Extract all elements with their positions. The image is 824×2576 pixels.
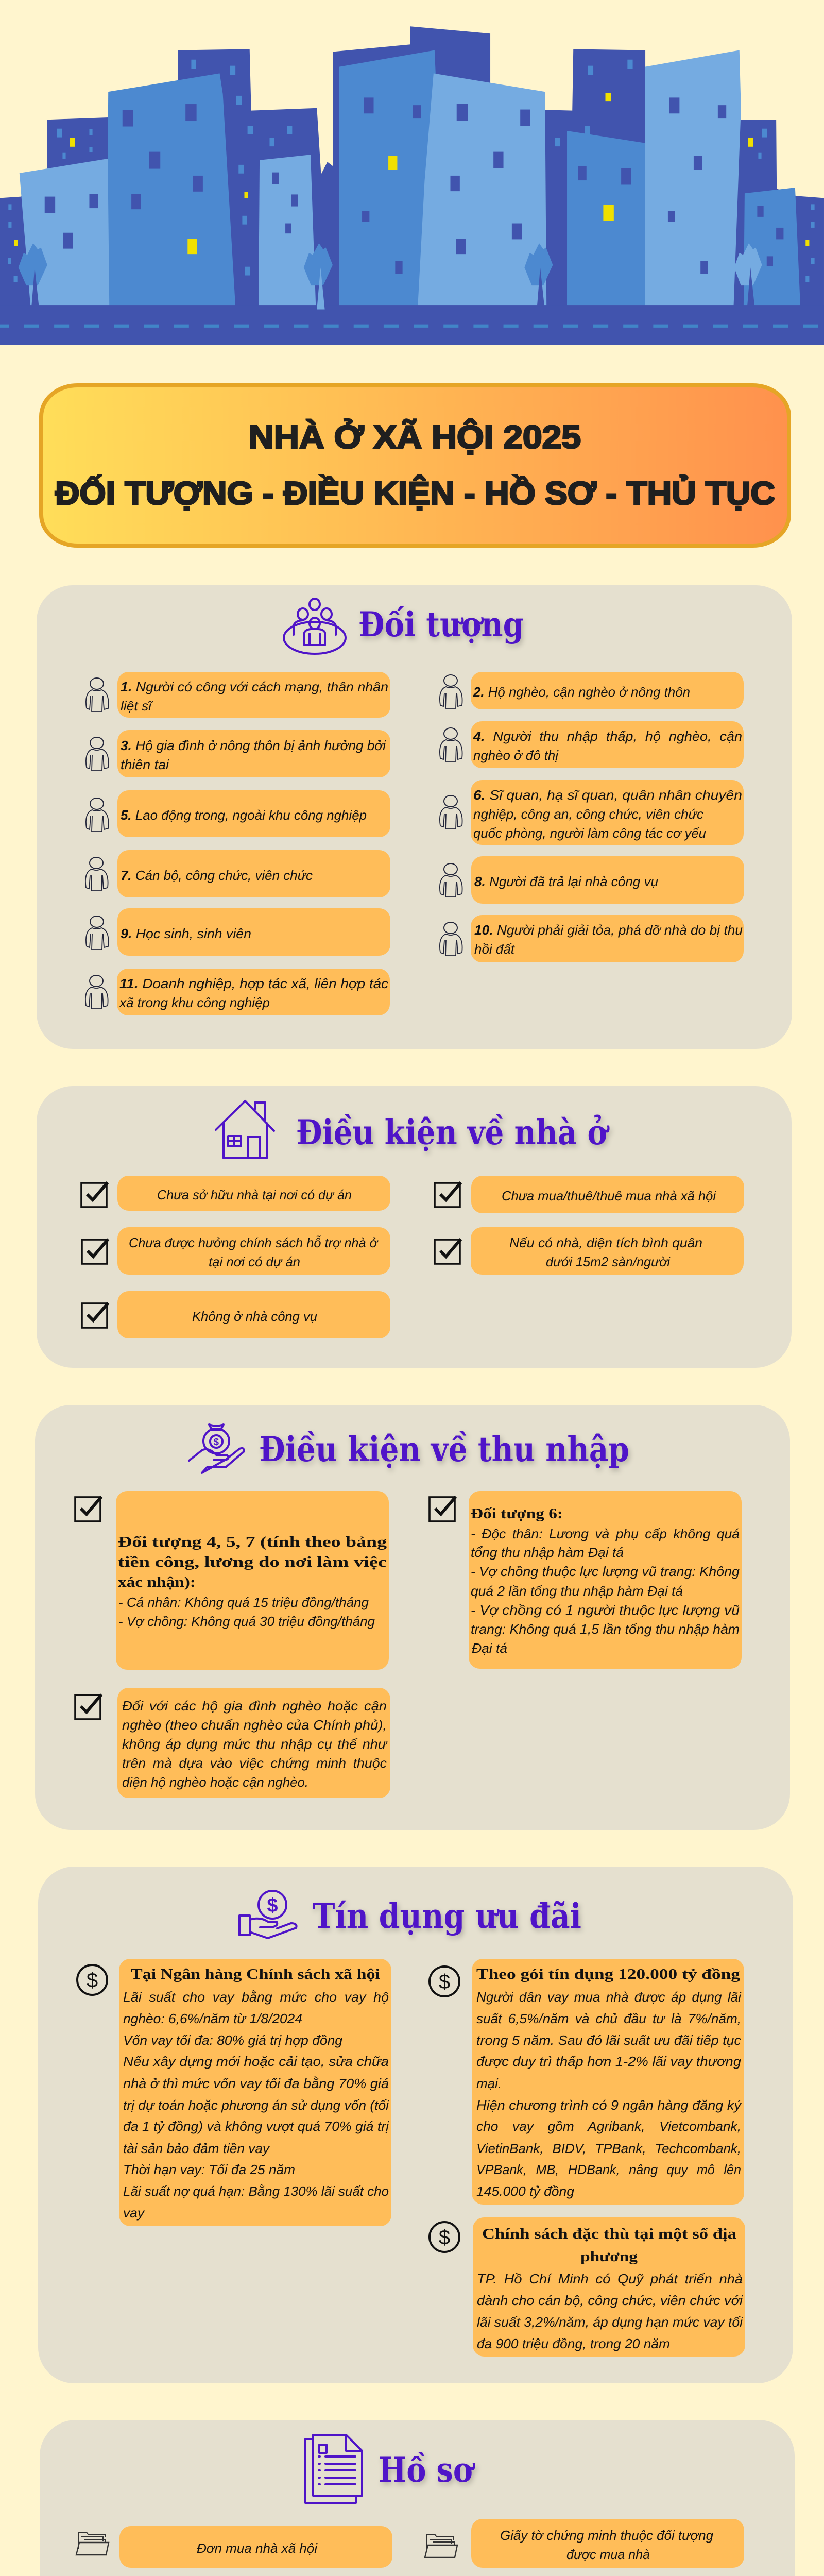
box: đối tượng 6: - Vợ chồng có 1 người thuộc lực lượng vũ [471, 1602, 740, 1618]
panel: hồ sơ [40, 2420, 795, 2576]
item 7 [117, 850, 390, 897]
box: gói tín dụng 120.000 tỷ: suất 6,5%/năm và chủ đầu tư là 7%/năm, [476, 2011, 741, 2026]
box: ngân hàng chính sách: tài sản bảo đảm tiền vay [123, 2141, 270, 2156]
box: ngân hàng chính sách [119, 1959, 391, 2226]
item 5: 5. Lao động trong, ngoài khu công nghiệp [121, 807, 367, 823]
box: ngân hàng chính sách: nhà ở thì mức vốn vay tối đa bằng 70% giá [123, 2076, 389, 2091]
heading: Đối tượng [358, 604, 524, 645]
item 2: 2. Hộ nghèo, cận nghèo ở nông thôn [473, 684, 690, 700]
box: ngân hàng chính sách: đa 1 tỷ đồng) và không vượt quá 70% giá trị [123, 2119, 389, 2134]
box: gói tín dụng 120.000 tỷ [472, 1959, 744, 2205]
condition: diện tích: Nếu có nhà, diện tích bình quân [509, 1235, 702, 1250]
box: chính sách đặc thù: đa 900 triệu đồng, trong 20 năm [477, 2336, 670, 2351]
box: hộ nghèo [117, 1688, 390, 1798]
box: ngân hàng chính sách: Lãi suất nợ quá hạn: Bằng 130% lãi suất cho [123, 2183, 389, 2199]
dollar icons [77, 1965, 459, 2252]
title banner [41, 385, 789, 546]
box: gói tín dụng 120.000 tỷ: mại. [476, 2076, 502, 2091]
box: đối tượng 6 [469, 1491, 742, 1669]
condition: nhà công vụ [117, 1291, 390, 1338]
box: đối tượng 6: - Độc thân: Lương và phụ cấp không quá [471, 1526, 740, 1541]
box: gói tín dụng 120.000 tỷ: Theo gói tín dụng 120.000 tỷ đồng [476, 1966, 741, 1982]
checkboxes [75, 1497, 456, 1719]
box: chính sách đặc thù [473, 2217, 745, 2357]
box: đối tượng 4, 5, 7: - Vợ chồng: Không quá 30 triệu đồng/tháng [118, 1614, 375, 1629]
condition: chưa được hưởng [117, 1227, 390, 1275]
item 3: thiên tai [121, 757, 169, 772]
illustration: city skyline [0, 26, 824, 345]
heading: Điều kiện về thu nhập [259, 1429, 629, 1469]
title line 1: NHÀ Ở XÃ HỘI 2025 [249, 419, 581, 455]
icon: people group [284, 599, 346, 654]
box: chính sách đặc thù: TP. Hồ Chí Minh có Quỹ phát triển nhà [477, 2271, 743, 2286]
box: ngân hàng chính sách: Vốn vay tối đa: 80% giá trị hợp đồng [123, 2032, 343, 2048]
box: đối tượng 4, 5, 7: - Cá nhân: Không quá 15 triệu đồng/tháng [118, 1595, 369, 1610]
item 3: 3. Hộ gia đình ở nông thôn bị ảnh hưởng bởi [121, 738, 386, 753]
box: đối tượng 4, 5, 7: tiền công, lương do nơi làm việc [118, 1554, 387, 1570]
heading: Hồ sơ [379, 2450, 475, 2490]
box: gói tín dụng 120.000 tỷ: Hiện chương trình có 9 ngân hàng đăng ký [476, 2097, 742, 2113]
box: hộ nghèo: diện hộ nghèo hoặc cận nghèo. [122, 1774, 308, 1790]
box: gói tín dụng 120.000 tỷ: cho vay gồm Agribank, Vietcombank, [476, 2119, 741, 2134]
item 1: 1. Người có công với cách mạng, thân nhân [121, 679, 388, 694]
box: gói tín dụng 120.000 tỷ: 145.000 tỷ đồng [476, 2183, 575, 2199]
box: hộ nghèo: Đối với các hộ gia đình nghèo hoặc cận [122, 1698, 387, 1714]
item 8 [471, 856, 744, 904]
item 10: 10. Người phải giải tỏa, phá dỡ nhà do bị thu [474, 922, 743, 938]
icon: coin in hand: $ [267, 1895, 278, 1917]
condition: chưa mua [471, 1176, 744, 1213]
item 1: liệt sĩ [121, 698, 153, 714]
box: đối tượng 4, 5, 7: Đối tượng 4, 5, 7 (tính theo bảng [118, 1534, 387, 1550]
icon: document [305, 2435, 362, 2503]
item 4: 4. Người thu nhập thấp, hộ nghèo, cận [473, 728, 742, 744]
document: đơn mua [119, 2526, 392, 2568]
condition: chưa sở hữu [117, 1176, 390, 1211]
document: chứng minh đối tượng [471, 2519, 744, 2568]
box: gói tín dụng 120.000 tỷ: VPBank, MB, HDBank, nâng quy mô lên [476, 2162, 741, 2177]
item 2 [471, 672, 744, 709]
item 11 [117, 969, 390, 1015]
box: đối tượng 4, 5, 7: xác nhận): [118, 1574, 196, 1590]
panel: tín dụng ưu đãi [38, 1867, 793, 2383]
box: gói tín dụng 120.000 tỷ: Người dân vay mua nhà được áp dụng lãi [476, 1989, 742, 2005]
box: ngân hàng chính sách: Nếu xây dựng mới hoặc cải tạo, sửa chữa [123, 2054, 389, 2069]
condition: diện tích [471, 1227, 744, 1275]
item 6: 6. Sĩ quan, hạ sĩ quan, quân nhân chuyên [473, 787, 742, 803]
person icons [85, 675, 462, 1009]
box: gói tín dụng 120.000 tỷ: trong 5 năm. Sau đó lãi suất ưu đãi tiếp tục [476, 2032, 741, 2048]
box: ngân hàng chính sách: Tại Ngân hàng Chính sách xã hội [131, 1966, 380, 1982]
panel: đối tượng [37, 585, 792, 1049]
box: ngân hàng chính sách: trị dự toán hoặc phương án sử dụng vốn (tối [123, 2097, 389, 2113]
box: gói tín dụng 120.000 tỷ: VietinBank, BIDV, TPBank, Techcombank, [476, 2141, 741, 2156]
item 4: nghèo ở đô thị [473, 748, 559, 763]
box: đối tượng 6: tổng thu nhập hàm Đại tá [471, 1545, 624, 1560]
box: hộ nghèo: không áp dụng mức thu nhập cụ thể như [122, 1736, 388, 1752]
item 6: quốc phòng, người làm công tác cơ yếu [473, 825, 706, 841]
box: đối tượng 6: quá 2 lần tổng thu nhập hàm Đại tá [471, 1583, 683, 1599]
box: hộ nghèo: trên mà dựa vào việc chứng minh thuộc [122, 1755, 387, 1771]
checkboxes [81, 1182, 461, 1328]
item 11: 11. Doanh nghiệp, hợp tác xã, liên hợp tác [119, 976, 388, 991]
item 8: 8. Người đã trả lại nhà công vụ [474, 874, 658, 889]
panel: điều kiện về nhà ở [37, 1086, 792, 1368]
title line 2: ĐỐI TƯỢNG - ĐIỀU KIỆN - HỒ SƠ - THỦ TỤC [55, 475, 775, 512]
panel: điều kiện về thu nhập [35, 1405, 790, 1830]
box: đối tượng 6: Đại tá [472, 1640, 507, 1656]
document: đơn mua: Đơn mua nhà xã hội [197, 2540, 318, 2556]
icon: money bag in hand [189, 1425, 244, 1473]
condition: chưa sở hữu: Chưa sở hữu nhà tại nơi có dự án [157, 1187, 352, 1202]
document: chứng minh đối tượng: Giấy tờ chứng minh thuộc đối tượng [500, 2528, 714, 2543]
heading: Tín dụng ưu đãi [313, 1896, 581, 1936]
box: chính sách đặc thù: dành cho cán bộ, công chức, viên chức với [477, 2293, 743, 2308]
folder icons [74, 2532, 457, 2576]
box: ngân hàng chính sách: Lãi suất cho vay bằng mức cho vay hộ [123, 1989, 389, 2005]
box: chính sách đặc thù: lãi suất 3,2%/năm, áp dụng hạn mức vay tối [477, 2314, 743, 2330]
box: chính sách đặc thù: phương [580, 2248, 638, 2265]
condition: chưa được hưởng: Chưa được hưởng chính sách hỗ trợ nhà ở [129, 1235, 379, 1250]
box: hộ nghèo: nghèo (theo chuẩn nghèo của Chính phủ), [122, 1717, 387, 1733]
icon: coin in hand [239, 1891, 297, 1938]
item 4 [471, 721, 744, 768]
item 9 [117, 908, 390, 956]
item 7: 7. Cán bộ, công chức, viên chức [121, 868, 313, 883]
item 5 [117, 790, 390, 837]
icon: money bag in hand: $ [214, 1437, 219, 1447]
box: gói tín dụng 120.000 tỷ: được duy trì thấp hơn 1-2% lãi vay thương [476, 2054, 742, 2069]
box: đối tượng 6: - Vợ chồng thuộc lực lượng vũ trang: Không [471, 1564, 740, 1579]
box: ngân hàng chính sách: Thời hạn vay: Tối đa 25 năm [123, 2162, 295, 2177]
item 6 [471, 780, 744, 845]
item 10: hồi đất [474, 941, 516, 957]
item 11: xã trong khu công nghiệp [118, 995, 270, 1010]
box: ngân hàng chính sách: nghèo: 6,6%/năm từ 1/8/2024 [123, 2011, 302, 2026]
heading: Điều kiện về nhà ở [296, 1112, 610, 1153]
icon: house [216, 1101, 274, 1158]
condition: chưa mua: Chưa mua/thuê/thuê mua nhà xã hội [502, 1188, 716, 1204]
document: chứng minh đối tượng: được mua nhà [566, 2547, 650, 2562]
item 3 [117, 730, 390, 777]
box: đối tượng 6: Đối tượng 6: [471, 1505, 563, 1522]
condition: chưa được hưởng: tại nơi có dự án [209, 1254, 300, 1269]
box: đối tượng 6: trang: Không quá 1,5 lần tổng thu nhập hàm [471, 1621, 740, 1637]
box: chính sách đặc thù: Chính sách đặc thù tại một số địa [482, 2226, 737, 2242]
item 6: nghiệp, công an, công chức, viên chức [473, 806, 703, 822]
item 10 [471, 915, 744, 962]
item 1 [117, 672, 390, 718]
box: đối tượng 4, 5, 7 [116, 1491, 389, 1670]
box: ngân hàng chính sách: vay [123, 2205, 145, 2221]
condition: diện tích: dưới 15m2 sàn/người [546, 1254, 671, 1269]
condition: nhà công vụ: Không ở nhà công vụ [192, 1309, 317, 1324]
item 9: 9. Học sinh, sinh viên [121, 926, 251, 941]
